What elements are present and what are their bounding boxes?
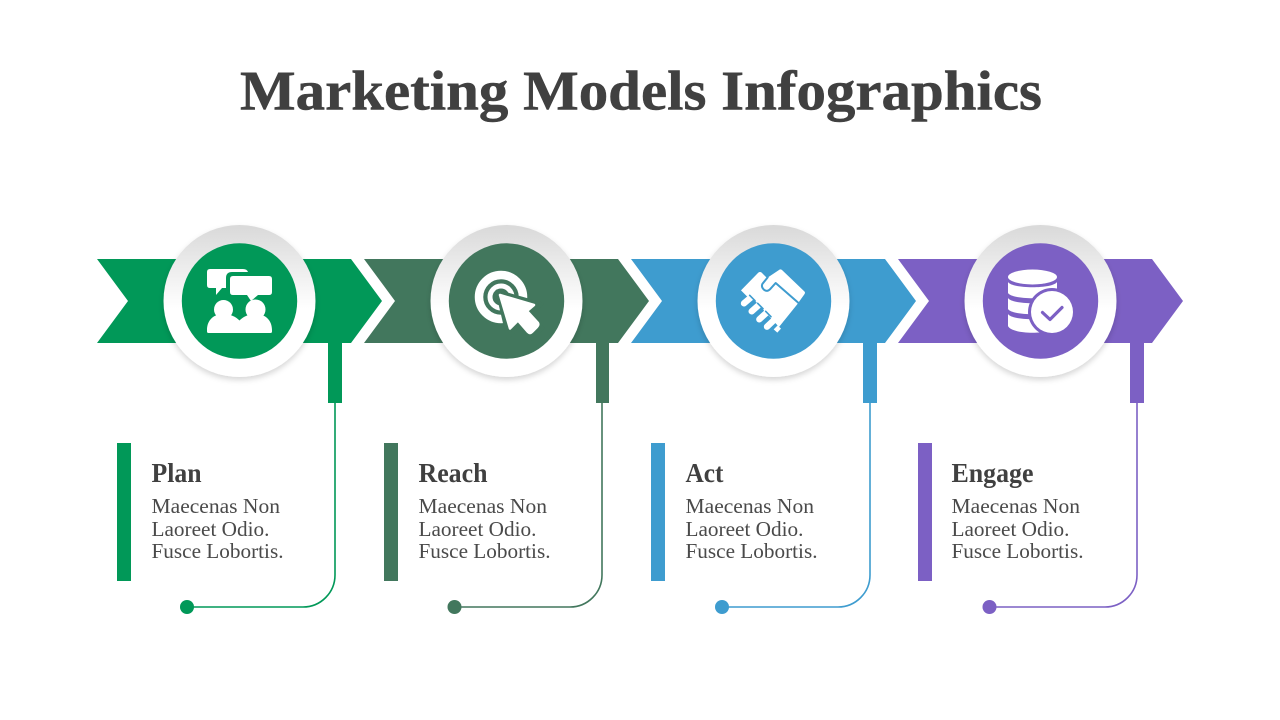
connector stem: act: [863, 343, 877, 403]
panel: reach: [364, 225, 649, 614]
arrow: engage chevron: [898, 259, 1183, 343]
accent bar: reach: [384, 443, 398, 581]
badge disc: act: [716, 243, 831, 359]
text block: reach: Fusce Lobortis.: [418, 539, 550, 563]
badge disc: plan: [182, 243, 297, 359]
heading: engage: Engage: [952, 458, 1034, 488]
text block: plan: [152, 494, 284, 563]
arrow: act chevron: [631, 259, 916, 343]
badge ring: act: [698, 225, 850, 377]
connector line: act: [722, 403, 870, 607]
badge ring: reach: [430, 225, 582, 377]
icon: people talking: [207, 269, 272, 333]
text block: plan: Maecenas Non: [152, 494, 281, 518]
title: Marketing Models Infographics: [240, 60, 1042, 122]
connector stem: plan: [328, 343, 342, 403]
accent bar: plan: [117, 443, 131, 581]
panel: engage: [898, 225, 1183, 614]
connector stem: reach: [596, 343, 609, 403]
text block: reach: Maecenas Non: [418, 494, 548, 518]
icon: handshake: [741, 269, 805, 333]
accent bar: engage: [918, 443, 932, 581]
icon: database check: [1008, 270, 1076, 336]
heading: plan: Plan: [152, 458, 202, 488]
connector dot: act: [715, 600, 729, 614]
text block: engage: Laoreet Odio.: [952, 517, 1070, 541]
badge ring: plan: [164, 225, 316, 377]
text block: plan: Laoreet Odio.: [152, 517, 270, 541]
badge disc: engage: [983, 243, 1098, 359]
panel: act: [631, 225, 916, 614]
text block: engage: Fusce Lobortis.: [952, 539, 1084, 563]
text block: act: Laoreet Odio.: [686, 517, 804, 541]
text block: plan: Fusce Lobortis.: [152, 539, 284, 563]
text block: engage: [952, 494, 1084, 563]
connector line: plan: [187, 403, 335, 607]
text block: reach: [418, 494, 550, 563]
heading: act: Act: [686, 458, 724, 488]
arrow: plan chevron: [97, 259, 382, 343]
connector line: reach: [454, 403, 602, 607]
connector dot: plan: [180, 600, 194, 614]
text block: act: Maecenas Non: [686, 494, 815, 518]
arrow: reach chevron: [364, 259, 649, 343]
text block: act: [686, 494, 818, 563]
connector dot: reach: [448, 600, 462, 614]
connector stem: engage: [1130, 343, 1144, 403]
badge disc: reach: [449, 243, 564, 359]
panel: plan: [97, 225, 382, 614]
icon: target and cursor: [479, 275, 543, 339]
heading: reach: Reach: [418, 458, 488, 488]
badge ring: engage: [964, 225, 1116, 377]
text block: engage: Maecenas Non: [952, 494, 1081, 518]
accent bar: act: [651, 443, 665, 581]
connector line: engage: [990, 403, 1137, 607]
text block: reach: Laoreet Odio.: [418, 517, 536, 541]
connector dot: engage: [982, 600, 996, 614]
text block: act: Fusce Lobortis.: [686, 539, 818, 563]
